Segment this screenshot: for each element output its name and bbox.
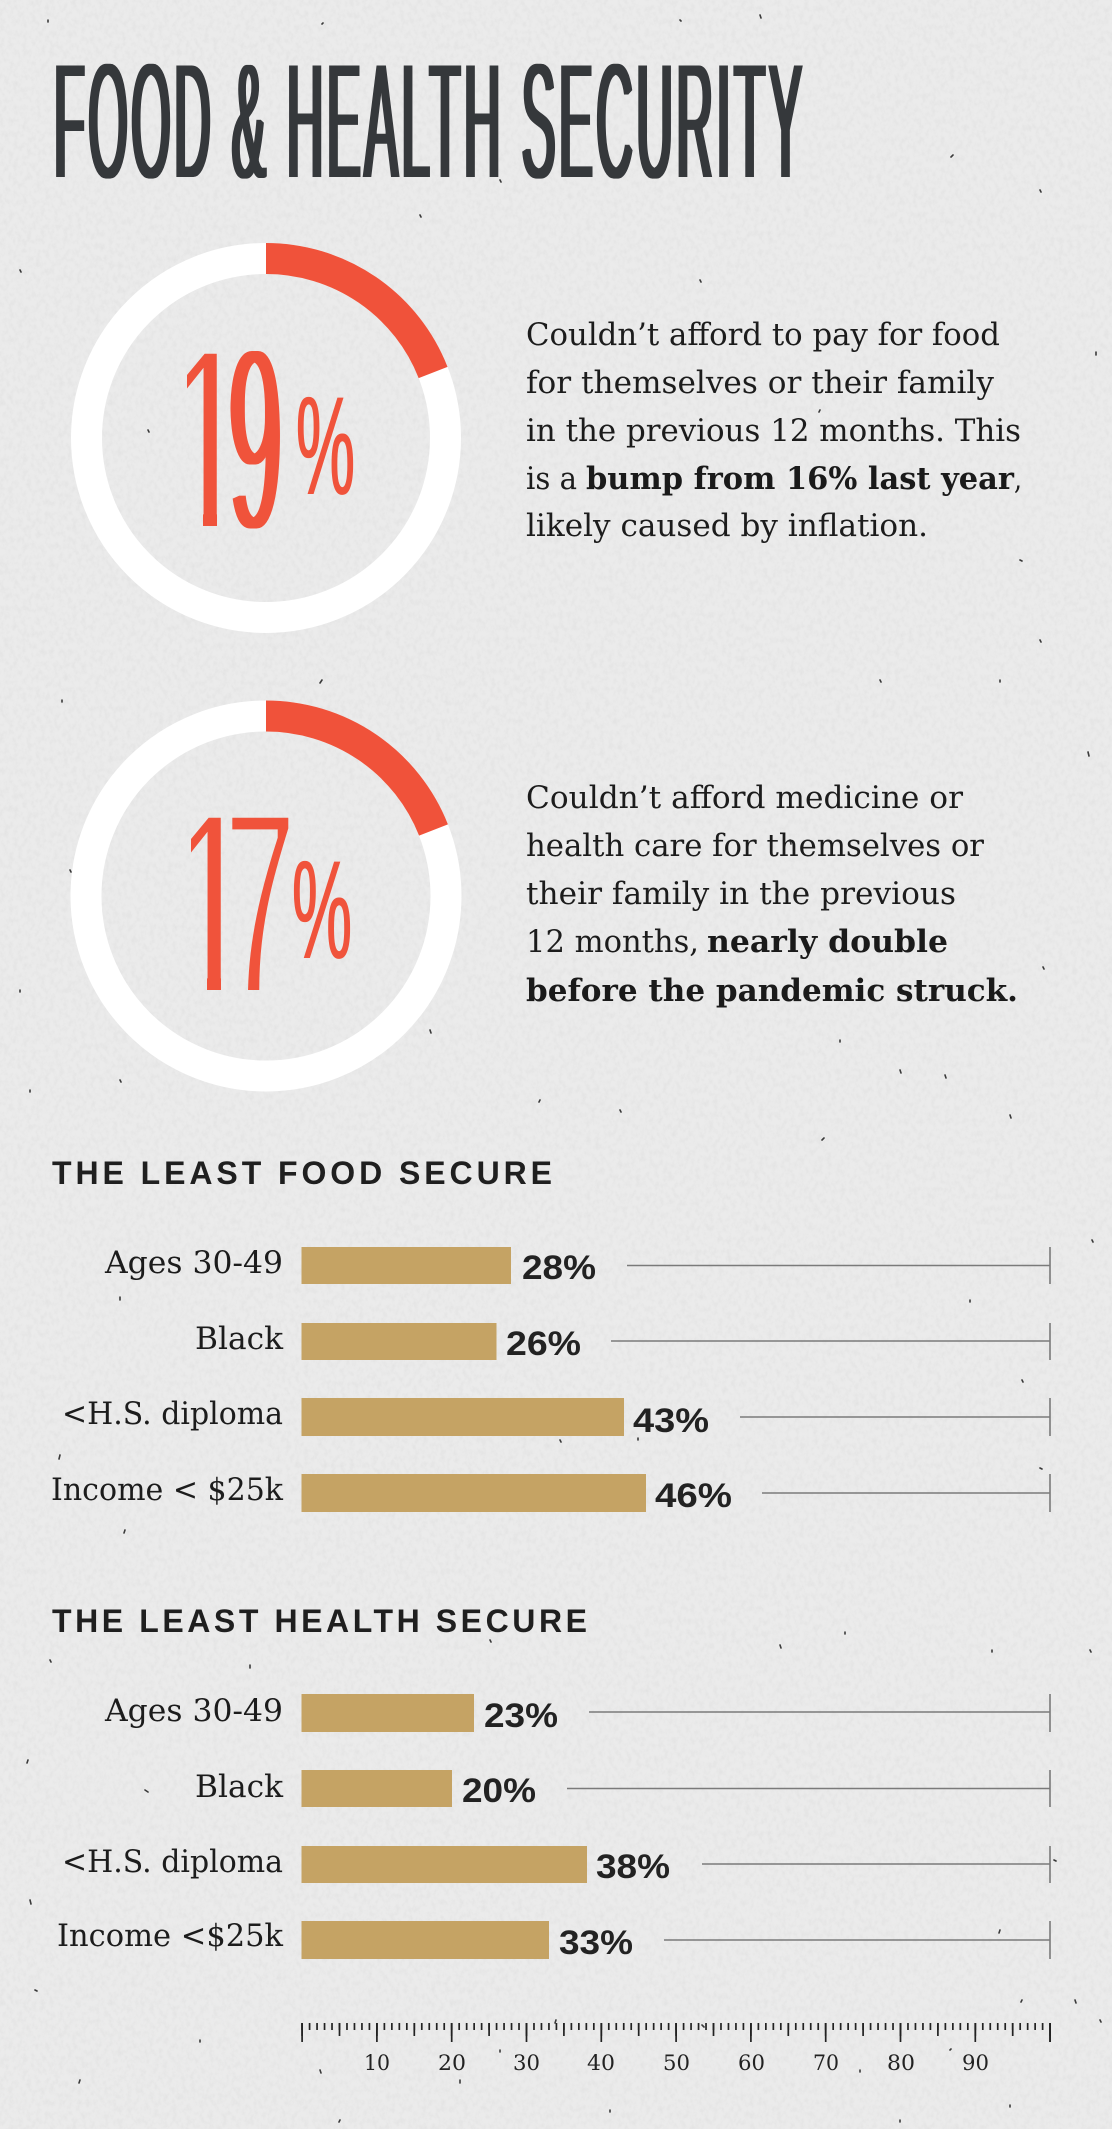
- donut chart: 17 percent: 1: [170, 758, 253, 1051]
- axis: percentage ruler: 20: [438, 2051, 466, 2075]
- bar row: less than high school diploma, 43 percent: [62, 1396, 1050, 1440]
- bar row: ages 30-49, 28 percent: [104, 1245, 1050, 1287]
- panel: the least health secure: [52, 1603, 1050, 1962]
- donut chart: 19 percent: 9: [229, 293, 281, 586]
- text block: food affordability description: bump from 16% last year: [586, 461, 1015, 497]
- bar row: less than high school diploma, 43 percent: 43%: [633, 1402, 709, 1440]
- bar row: black, 26 percent: [195, 1321, 1050, 1363]
- heading: THE LEAST HEALTH SECURE: [52, 1603, 587, 1639]
- bar row: ages 30-49, 23 percent: 23%: [484, 1697, 558, 1735]
- bar row: income under 25k, 46 percent: 46%: [655, 1477, 732, 1515]
- bar row: income under 25k, 46 percent: Income < $25k: [51, 1472, 283, 1508]
- axis: percentage ruler: 70: [813, 2051, 839, 2075]
- bar row: income under 25k, 46 percent: [51, 1472, 1050, 1515]
- axis: percentage ruler: 40: [587, 2051, 615, 2075]
- text block: health care affordability description: [526, 780, 1018, 1009]
- heading: THE LEAST FOOD SECURE: [52, 1155, 552, 1191]
- panel: food affordability stat: [86, 258, 1022, 618]
- bar row: less than high school diploma, 43 percent: <H.S. diploma: [62, 1396, 283, 1432]
- text block: food affordability description: [526, 317, 1022, 544]
- bar row: black, 20 percent: [195, 1769, 1050, 1810]
- text block: health care affordability description: before the pandemic struck.: [526, 973, 1018, 1009]
- text block: food affordability description: ,: [1014, 461, 1022, 497]
- text block: food affordability description: Couldn’t afford to pay for food: [526, 317, 1000, 353]
- bar row: income under 25k, 33 percent: Income <$25k: [57, 1918, 283, 1954]
- panel: the least food secure: [51, 1155, 1050, 1515]
- axis: percentage ruler: [301, 2023, 1051, 2075]
- text block: food affordability description: likely caused by inflation.: [526, 508, 928, 544]
- bar row: black, 26 percent: 26%: [506, 1325, 581, 1363]
- donut chart: 19 percent: 1: [166, 294, 249, 587]
- text block: food affordability description: for themselves or their family: [526, 365, 994, 401]
- donut chart: 19 percent: %: [296, 367, 355, 524]
- text block: health care affordability description: 12 months,: [526, 924, 699, 960]
- bar row: less than high school diploma, 38 percent: [62, 1844, 1050, 1886]
- bar row: less than high school diploma, 38 percent: <H.S. diploma: [62, 1844, 283, 1880]
- bar row: less than high school diploma, 38 percent: 38%: [596, 1848, 670, 1886]
- panel: health care affordability stat: [86, 716, 1018, 1076]
- axis: percentage ruler: 60: [738, 2051, 765, 2075]
- bar row: black, 20 percent: Black: [195, 1769, 283, 1805]
- bar row: income under 25k, 33 percent: 33%: [559, 1924, 633, 1962]
- text block: health care affordability description: health care for themselves or: [526, 828, 984, 864]
- bar row: ages 30-49, 28 percent: 28%: [522, 1249, 596, 1287]
- donut chart: 17 percent: %: [292, 831, 352, 988]
- bar row: ages 30-49, 23 percent: Ages 30-49: [104, 1693, 283, 1729]
- text block: health care affordability description: their family in the previous: [526, 876, 956, 912]
- bar row: ages 30-49, 28 percent: Ages 30-49: [104, 1245, 283, 1281]
- axis: percentage ruler: 80: [887, 2051, 915, 2075]
- donut chart: 19 percent: [86, 258, 446, 618]
- bar row: black, 20 percent: 20%: [462, 1772, 536, 1810]
- text block: food affordability description: in the previous 12 months. This: [526, 413, 1021, 449]
- axis: percentage ruler: 90: [962, 2051, 989, 2075]
- bar row: ages 30-49, 23 percent: [104, 1693, 1050, 1735]
- axis: percentage ruler: 30: [513, 2051, 540, 2075]
- text block: health care affordability description: Couldn’t afford medicine or: [526, 780, 963, 816]
- donut chart: 17 percent: 7: [226, 758, 294, 1050]
- text block: health care affordability description: nearly double: [707, 924, 948, 960]
- axis: percentage ruler: 10: [364, 2051, 390, 2075]
- bar row: black, 26 percent: Black: [195, 1321, 283, 1357]
- text block: food affordability description: is a: [526, 461, 577, 497]
- donut chart: 17 percent: [86, 716, 446, 1076]
- bar row: income under 25k, 33 percent: [57, 1918, 1050, 1962]
- axis: percentage ruler: 50: [663, 2051, 690, 2075]
